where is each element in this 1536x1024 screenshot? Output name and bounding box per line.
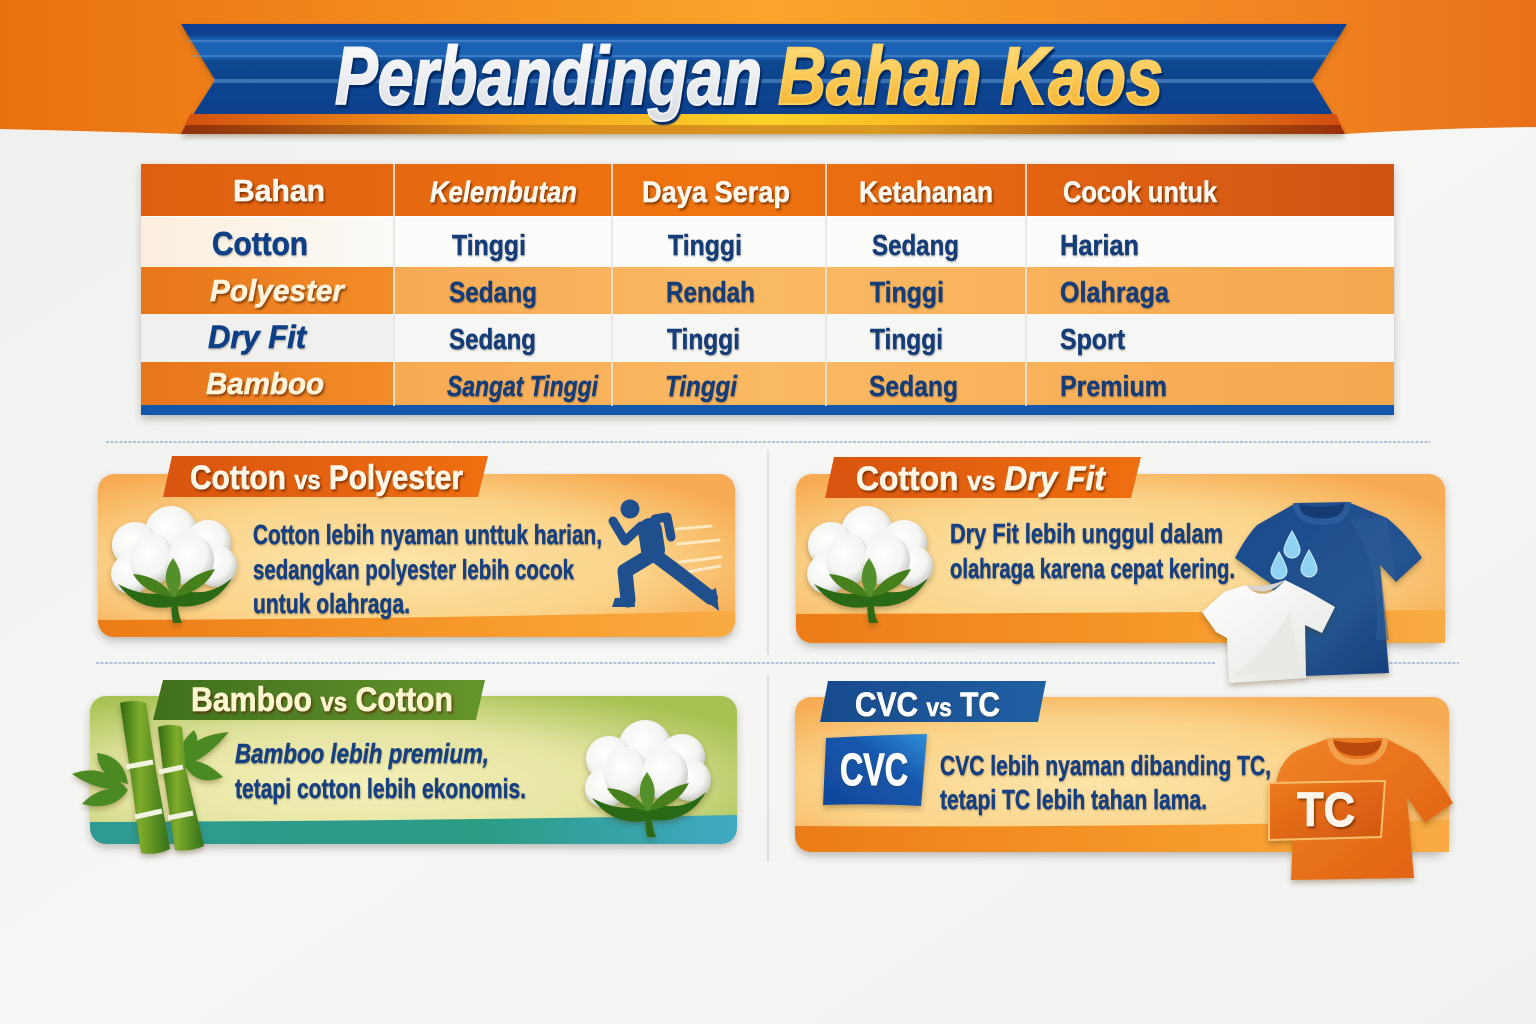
icon: cotton boll (111, 506, 237, 623)
row: Polyester: Sedang (449, 277, 537, 309)
row: Bamboo: Sangat Tinggi (447, 371, 599, 403)
row: Dry Fit: Sport (1060, 324, 1125, 356)
badge: CVC: CVC (840, 744, 908, 795)
panel: Cotton vs Dry Fit (796, 457, 1445, 683)
body text (253, 519, 602, 619)
row: Bamboo: Premium (1060, 371, 1167, 403)
panel: CVC vs TC (795, 681, 1453, 880)
body text: olahraga karena cepat kering. (950, 553, 1235, 584)
icon: white shirt (1202, 580, 1335, 683)
table header row: Kelembutan (430, 176, 577, 209)
row: Polyester: Olahraga (1060, 277, 1170, 309)
badge: CVC (823, 734, 927, 806)
body text: untuk olahraga. (253, 588, 410, 619)
row: Bamboo: Bamboo (206, 366, 324, 401)
row: Cotton: Tinggi (452, 230, 526, 262)
title text: Bahan Kaos (778, 31, 1163, 122)
row: Bamboo (141, 362, 1394, 406)
heading ribbon (820, 681, 1046, 724)
table header row: Ketahanan (859, 176, 993, 209)
panel: Bamboo vs Cotton (72, 680, 737, 854)
body text (235, 738, 526, 804)
icon: cotton boll (807, 506, 933, 623)
row: Dry Fit: Dry Fit (208, 319, 307, 355)
heading ribbon: Cotton vs Polyester (190, 459, 463, 497)
row: Cotton (141, 217, 1394, 267)
body text (950, 518, 1235, 584)
table header row: Daya Serap (642, 176, 790, 209)
icon: runner (612, 500, 721, 611)
table header row: Bahan (233, 173, 325, 208)
heading ribbon: Bamboo vs Cotton (191, 681, 453, 719)
table header row (141, 164, 1394, 216)
table header row: Cocok untuk (1063, 176, 1217, 209)
title text: Perbandingan (335, 31, 762, 122)
row: Cotton: Tinggi (668, 230, 742, 262)
row: Cotton: Sedang (872, 230, 959, 262)
row: Cotton: Cotton (212, 225, 308, 262)
body text: Cotton lebih nyaman unttuk harian, (253, 519, 602, 550)
title text (335, 31, 1163, 122)
row: Bamboo: Tinggi (665, 371, 738, 403)
row: Cotton: Harian (1060, 230, 1139, 262)
icon: orange shirt with TC label: TC (1297, 784, 1355, 837)
heading ribbon: CVC vs TC (855, 686, 1000, 724)
row: Polyester: Polyester (210, 273, 346, 308)
row: Polyester: Tinggi (870, 277, 944, 309)
row: Polyester (141, 267, 1394, 314)
row: Bamboo: Sedang (869, 371, 958, 403)
row: Dry Fit: Tinggi (667, 324, 740, 356)
icon: navy shirt with water drops (1235, 502, 1422, 676)
row: Dry Fit: Tinggi (870, 324, 943, 356)
body text: Dry Fit lebih unggul dalam (950, 518, 1223, 549)
body text: tetapi TC lebih tahan lama. (940, 784, 1207, 815)
row: Dry Fit: Sedang (449, 324, 536, 356)
body text: CVC lebih nyaman dibanding TC, (940, 750, 1271, 781)
header band (0, 0, 1536, 134)
heading ribbon: Cotton vs Dry Fit (856, 460, 1107, 498)
comparison table (141, 164, 1394, 415)
row: Polyester: Rendah (666, 277, 755, 309)
icon: orange shirt with TC label (1269, 738, 1453, 880)
body text: tetapi cotton lebih ekonomis. (235, 773, 526, 804)
body text (940, 750, 1271, 815)
body text: Bamboo lebih premium, (235, 738, 489, 769)
icon: bamboo (72, 701, 229, 854)
panel: Cotton vs Polyester (98, 456, 735, 637)
row: Dry Fit (141, 314, 1394, 362)
body text: sedangkan polyester lebih cocok (253, 554, 574, 585)
title banner (181, 24, 1347, 134)
icon: cotton boll (585, 720, 711, 837)
